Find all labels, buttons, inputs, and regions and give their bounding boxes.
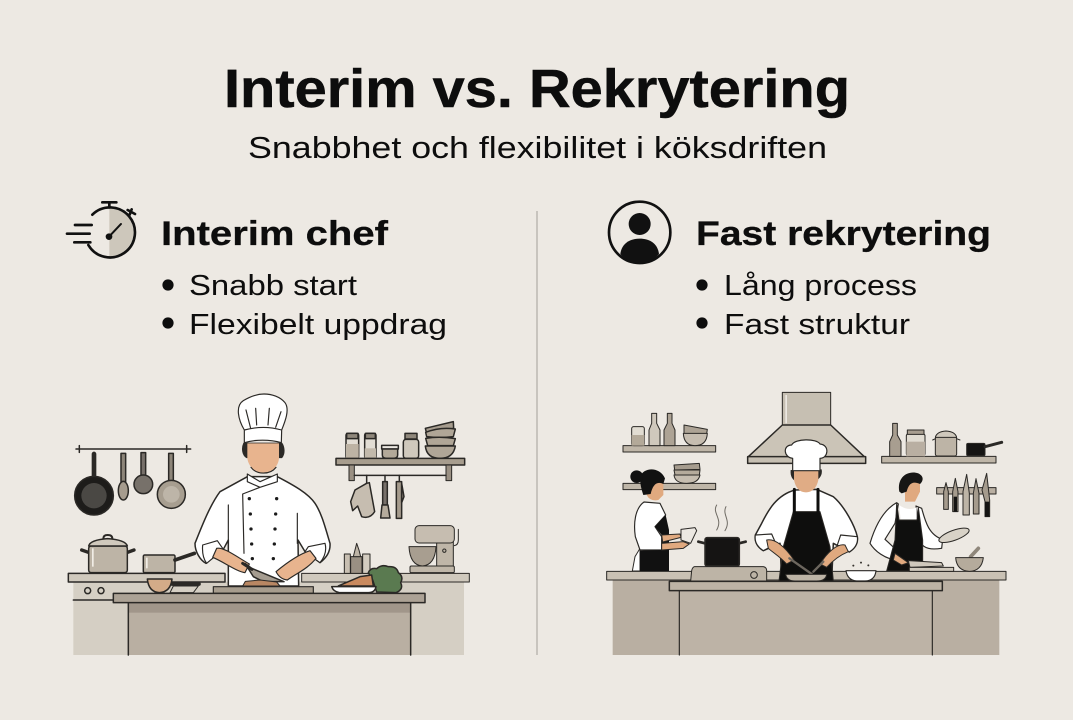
pan bbox=[786, 574, 827, 581]
pan and bowl on stove bbox=[147, 579, 199, 593]
left sleeve bbox=[870, 503, 898, 560]
utensils bbox=[789, 558, 823, 574]
white top bbox=[635, 502, 666, 550]
forearms bbox=[662, 534, 689, 550]
dish bbox=[681, 528, 697, 543]
back counters and stove bbox=[68, 573, 469, 655]
plate bbox=[937, 525, 971, 546]
mortar bbox=[956, 548, 983, 571]
jacket bbox=[195, 477, 330, 586]
left cook bbox=[630, 469, 697, 571]
list: interim benefits: Flexibelt uppdrag bbox=[189, 309, 447, 341]
steaming pot on stove bbox=[691, 505, 767, 581]
head bbox=[791, 469, 822, 482]
list: interim benefits bbox=[162, 270, 447, 341]
head and hair bbox=[647, 480, 663, 500]
left shelves bbox=[623, 413, 716, 490]
island bbox=[669, 581, 942, 655]
bowl bbox=[846, 562, 876, 581]
hood bbox=[748, 392, 866, 463]
right sleeve bbox=[916, 506, 943, 549]
collar and placket bbox=[228, 474, 297, 553]
black apron bbox=[640, 503, 669, 571]
vegetables plate bbox=[332, 566, 402, 593]
illustration: recruited kitchen team bbox=[607, 392, 1006, 655]
title: Interim vs. Rekrytering bbox=[224, 59, 850, 119]
white jacket bbox=[755, 489, 858, 580]
hand bbox=[893, 553, 908, 565]
head bbox=[905, 482, 920, 502]
list: interim benefits: Snabb start bbox=[189, 270, 357, 302]
hat bbox=[238, 394, 287, 443]
bottles bbox=[344, 543, 370, 573]
icon: stopwatch bbox=[67, 202, 135, 257]
illustration: interim chef kitchen bbox=[68, 394, 469, 655]
subtitle: Snabbhet och flexibilitet i köksdriften bbox=[248, 130, 827, 165]
cabinets bbox=[607, 571, 1006, 655]
right shelf bbox=[336, 422, 465, 518]
heading: Interim chef: Interim chef bbox=[161, 215, 389, 253]
head bbox=[243, 443, 284, 457]
apron bbox=[779, 512, 833, 581]
apron bbox=[887, 503, 923, 571]
icon: person bbox=[609, 202, 670, 264]
apron straps bbox=[794, 489, 818, 513]
right shelf bbox=[882, 423, 1002, 463]
forearms and hands bbox=[213, 548, 316, 580]
right cook bbox=[870, 472, 971, 571]
pan on counter bbox=[908, 561, 943, 567]
head chef bbox=[755, 440, 858, 581]
heading: Fast rekrytering: Fast rekrytering bbox=[696, 215, 991, 253]
pot bbox=[82, 535, 134, 573]
knife bbox=[245, 563, 284, 582]
island bbox=[113, 593, 425, 655]
forearms and hands bbox=[767, 540, 848, 567]
list: recruitment traits: Fast struktur bbox=[724, 309, 910, 341]
sleeve cuffs bbox=[202, 541, 326, 563]
sleeve cuffs bbox=[755, 534, 858, 552]
hat bbox=[785, 440, 827, 471]
knife rack bbox=[937, 473, 996, 517]
pot rack bbox=[75, 446, 191, 515]
stand mixer bbox=[409, 526, 458, 573]
list: recruitment traits: Lång process bbox=[724, 270, 917, 302]
jacket buttons bbox=[248, 497, 278, 560]
list: recruitment traits bbox=[696, 270, 917, 341]
back apron fold bbox=[632, 548, 640, 571]
head chef bbox=[195, 394, 330, 586]
saucepan bbox=[143, 553, 194, 573]
food and board bbox=[213, 580, 313, 593]
white chest bbox=[899, 505, 917, 519]
